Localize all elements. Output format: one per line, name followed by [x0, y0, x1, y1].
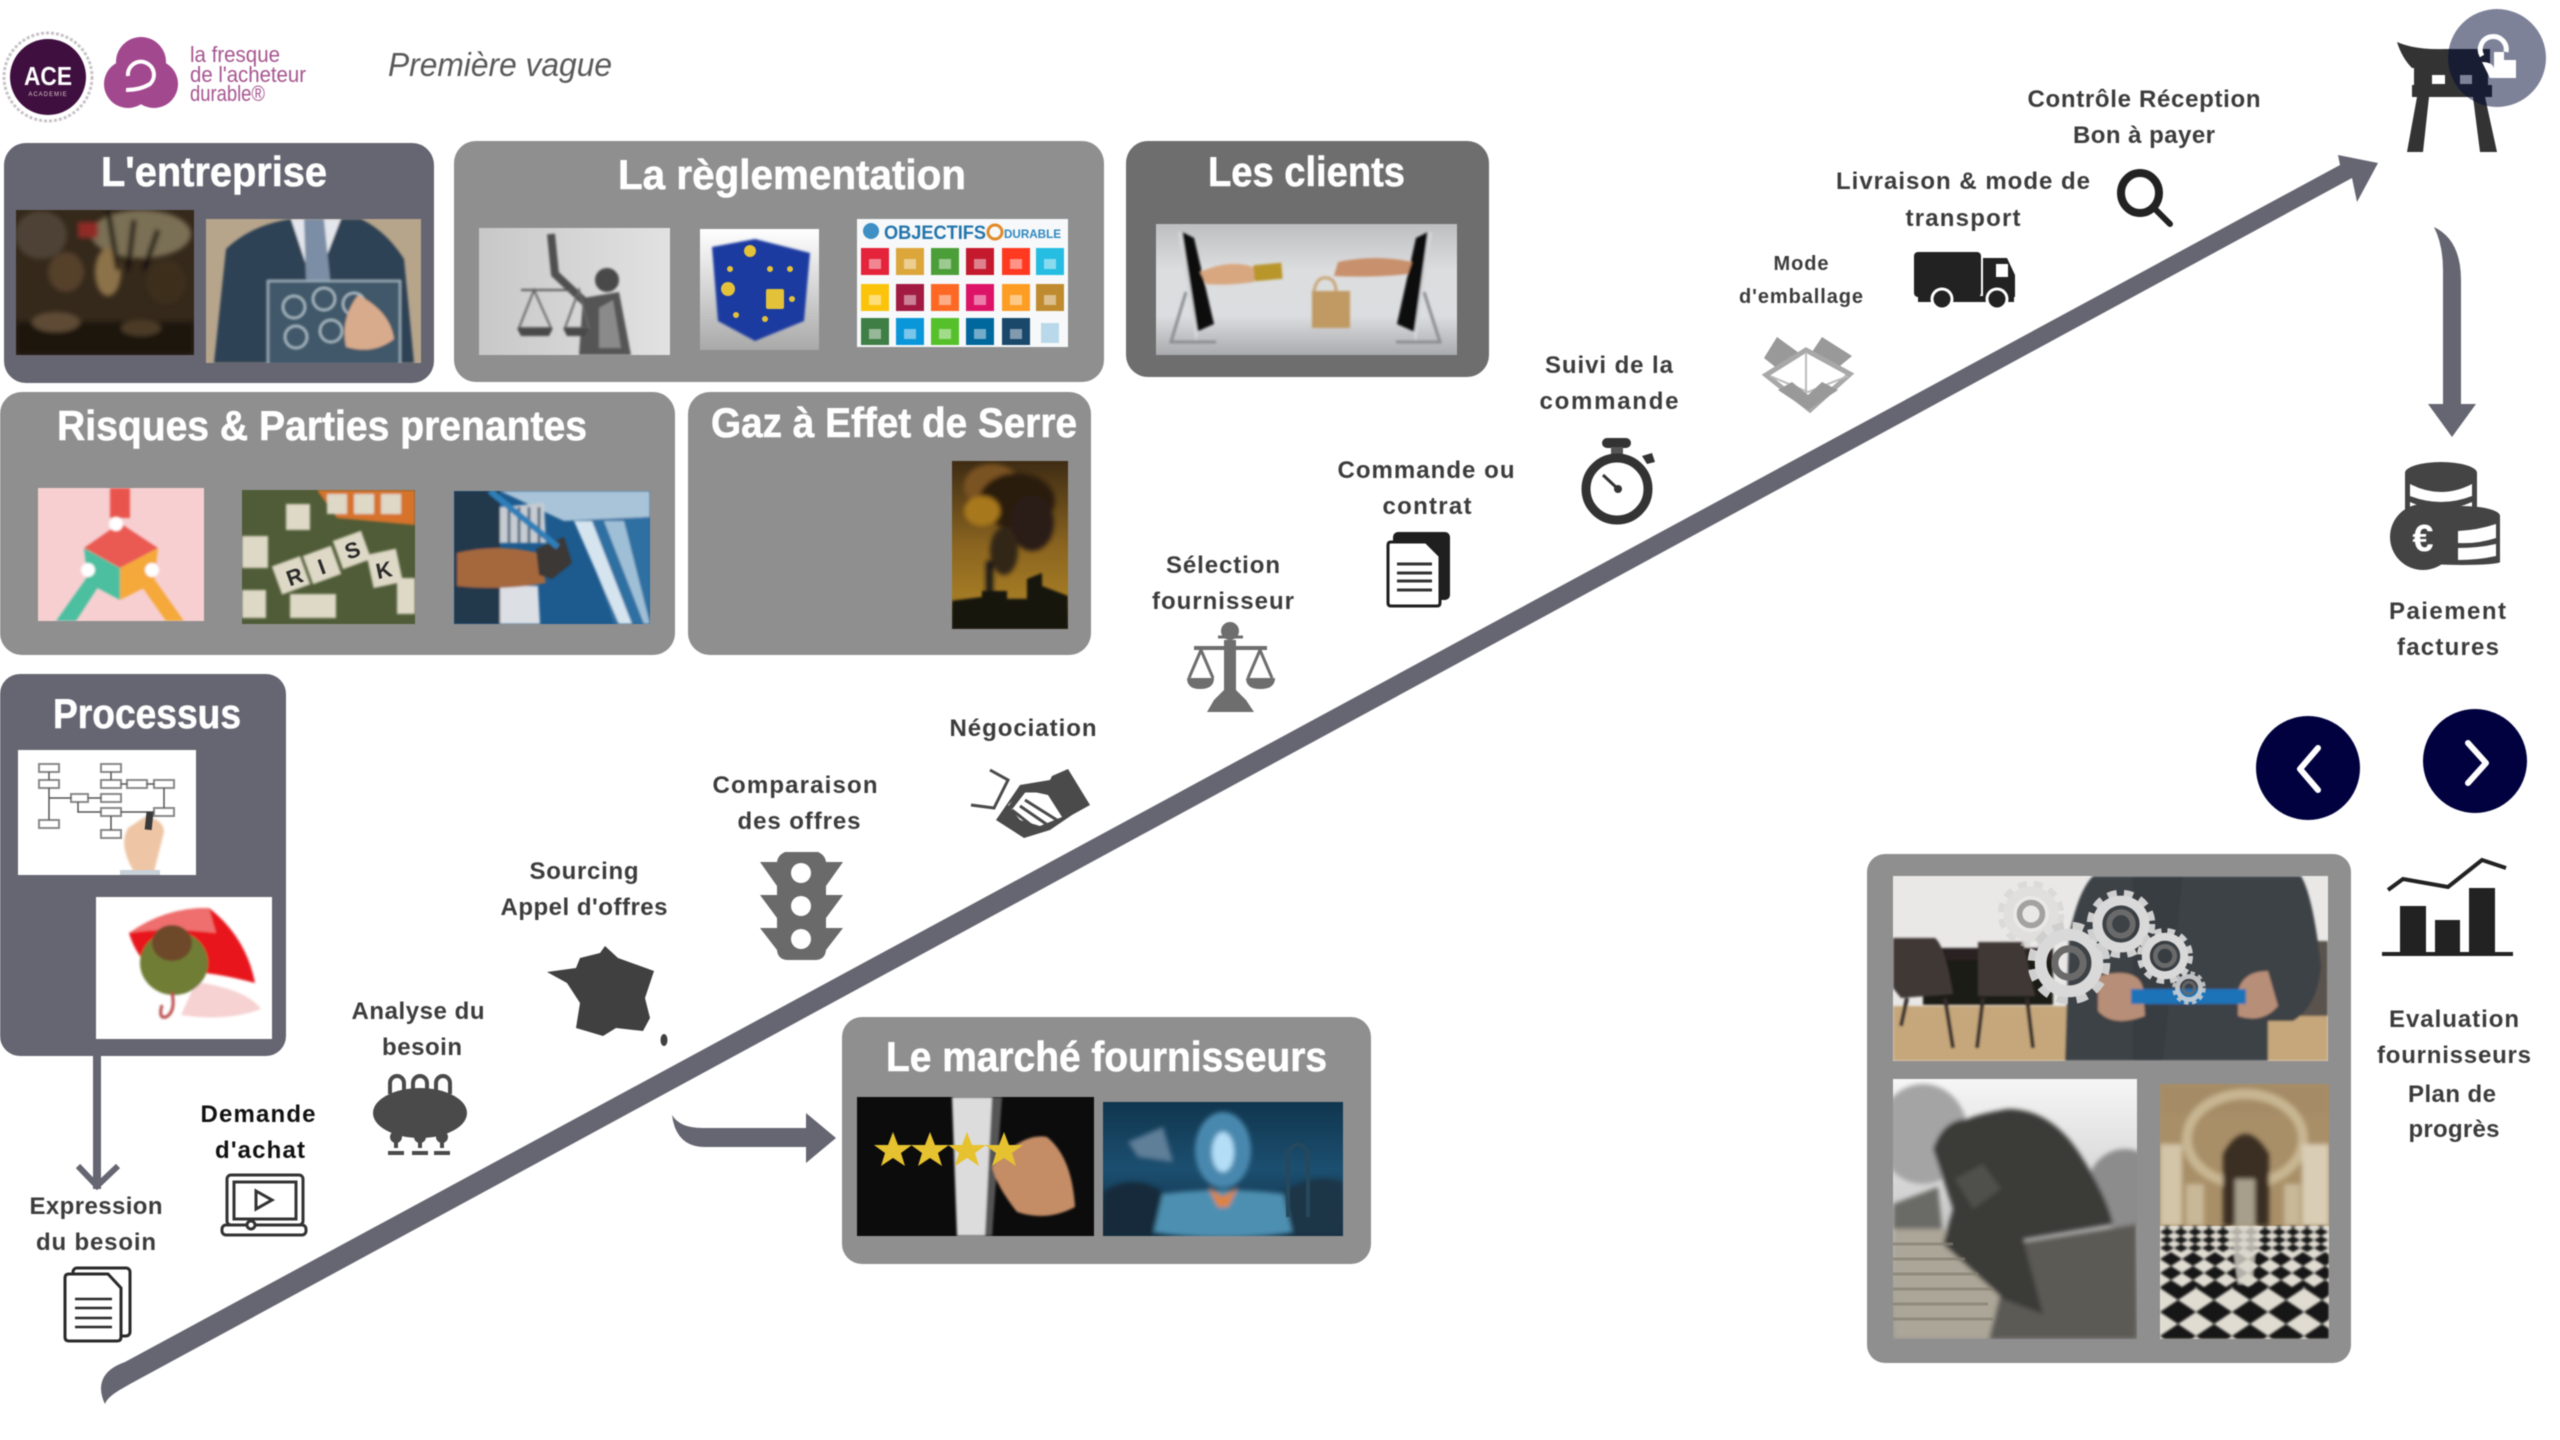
- panel: Processus: [0, 674, 286, 1056]
- step: Suivi de la commande: commande: [1540, 388, 1678, 415]
- logo: la fresque de l'acheteur durable: de l'acheteur: [190, 62, 306, 87]
- icon: traffic light: [760, 852, 843, 960]
- logo: ACE Academie: ACADEMIE: [28, 92, 68, 98]
- step: Evaluation fournisseurs Plan de progrès: Plan de: [2408, 1081, 2496, 1108]
- image: Rodin's Thinker: [1892, 1078, 2138, 1340]
- step: Evaluation fournisseurs Plan de progrès: progrès: [2408, 1116, 2500, 1143]
- button: next: [2423, 709, 2527, 813]
- step: Contrôle Réception Bon à payer: [2028, 86, 2260, 149]
- step: Mode d'emballage: Mode: [1774, 253, 1828, 275]
- step: Commande ou contrat: Commande ou: [1338, 457, 1514, 484]
- image: EU cube with padlock: [699, 228, 820, 350]
- image: palace gallery with checkered floor: [2160, 1084, 2330, 1340]
- step: Analyse du besoin: Analyse du: [352, 998, 484, 1025]
- heading: L'entreprise: L'entreprise: [101, 148, 327, 195]
- panel: photos evaluation: [1867, 854, 2351, 1363]
- step: Paiement factures: [2389, 598, 2506, 661]
- icon: open box: [1764, 337, 1852, 410]
- icon: stopwatch: [1586, 438, 1655, 520]
- step: Négociation: [950, 715, 1096, 838]
- icon: document: [65, 1268, 130, 1341]
- heading: Risques & Parties prenantes: Risques & Parties prenantes: [57, 402, 587, 449]
- step: Analyse du besoin: [352, 998, 484, 1153]
- image: RISK letter dice: [242, 490, 416, 624]
- step: Sélection fournisseur: fournisseur: [1152, 588, 1294, 615]
- image: RISK letter dice: K: [374, 556, 394, 584]
- image: hand drawing flowchart: [17, 749, 197, 876]
- heading: Le marché fournisseurs: Le marché fournisseurs: [886, 1033, 1327, 1080]
- step: Evaluation fournisseurs Plan de progrès: [2377, 1006, 2531, 1143]
- heading: Gaz à Effet de Serre: Gaz à Effet de Serre: [711, 399, 1077, 446]
- button: previous: [2256, 716, 2360, 820]
- heading: Les clients: Les clients: [1208, 148, 1405, 195]
- step: Suivi de la commande: Suivi de la: [1545, 352, 1674, 379]
- logo: la fresque de l'acheteur durable: durable®: [190, 81, 265, 106]
- arrow: reception to payment: [2428, 227, 2476, 437]
- image: rating stars: [856, 1096, 1095, 1237]
- heading: Première vague: Première vague: [388, 46, 612, 83]
- icon: torii gate: [2397, 42, 2497, 152]
- step: Mode d'emballage: d'emballage: [1739, 286, 1863, 308]
- step: Livraison & mode de transport: Livraison & mode de: [1836, 168, 2090, 195]
- step: Sélection fournisseur: [1152, 552, 1294, 712]
- image: Objectifs de développement durable: DURABLE: [1004, 227, 1061, 241]
- icon: handshake: [971, 769, 1090, 838]
- step: Expression du besoin: [30, 1193, 162, 1341]
- image: La Liberté guidant le peuple: [16, 210, 194, 356]
- icon: scales: [1187, 622, 1275, 712]
- step: Livraison & mode de transport: transport: [1906, 205, 2020, 232]
- step: Comparaison des offres: Comparaison: [712, 772, 878, 799]
- logo: ACE Academie: [4, 33, 92, 121]
- icon: truck: [1914, 252, 2015, 309]
- arrow: to Le marché fournisseurs: [672, 1113, 836, 1163]
- icon: contract document: [1388, 532, 1450, 606]
- image: RISK letter dice: I: [314, 554, 329, 580]
- image: blue fantasy landscape: [1102, 1101, 1344, 1237]
- image: red umbrella over tree: [95, 896, 273, 1040]
- image: Objectifs de développement durable: OBJECTIFS: [884, 223, 986, 244]
- image: e-commerce hands and monitors: [1155, 224, 1458, 356]
- panel: La règlementation: [454, 141, 1104, 382]
- step: Contrôle Réception Bon à payer: Bon à payer: [2073, 122, 2215, 149]
- step: Demande d'achat: [200, 1101, 316, 1235]
- image: factory smoke: [951, 460, 1069, 630]
- image: businessman with gears: [1892, 876, 2328, 1062]
- icon: bar and line chart: [2382, 860, 2513, 956]
- step: Livraison & mode de transport: [1836, 168, 2090, 309]
- step: Sélection fournisseur: Sélection: [1166, 552, 1280, 579]
- step: Comparaison des offres: [712, 772, 878, 960]
- step: Sourcing Appel d'offres: [500, 858, 668, 1046]
- step: Paiement factures: factures: [2397, 634, 2499, 661]
- icon: map of France: [547, 946, 668, 1046]
- panel: Le marché fournisseurs: [842, 1017, 1371, 1264]
- step: Négociation: Négociation: [950, 715, 1096, 742]
- step: Evaluation fournisseurs Plan de progrès: fournisseurs: [2377, 1042, 2531, 1069]
- icon: coins with euro: €: [2412, 518, 2434, 560]
- step: Comparaison des offres: des offres: [738, 808, 860, 835]
- step: Mode d'emballage: [1739, 253, 1863, 410]
- icon: magnifying glass: [2121, 173, 2170, 224]
- heading: La règlementation: La règlementation: [618, 151, 966, 198]
- logo: la fresque de l'acheteur durable: la fresque: [190, 42, 280, 67]
- icon: meeting group: [373, 1076, 467, 1153]
- arrow: Processus to Expression du besoin: [78, 1056, 118, 1189]
- step: Sourcing Appel d'offres: Appel d'offres: [500, 894, 668, 921]
- panel: L'entreprise: [4, 143, 434, 383]
- image: Objectifs de développement durable: [856, 218, 1069, 348]
- step: Commande ou contrat: contrat: [1382, 493, 1472, 520]
- step: Paiement factures: Paiement: [2389, 598, 2506, 625]
- step: Sourcing Appel d'offres: Sourcing: [530, 858, 638, 885]
- image: RISK letter dice: S: [341, 536, 364, 565]
- icon: coins with euro: [2390, 462, 2500, 570]
- button: unlock overlay: [2448, 9, 2546, 107]
- step: Expression du besoin: Expression: [30, 1193, 162, 1220]
- panel: Gaz à Effet de Serre: [688, 392, 1091, 655]
- step: Evaluation fournisseurs Plan de progrès: Evaluation: [2389, 1006, 2519, 1033]
- panel: Risques & Parties prenantes: [0, 392, 675, 655]
- step: Suivi de la commande: [1540, 352, 1678, 520]
- step: Demande d'achat: Demande: [200, 1101, 316, 1128]
- heading: Processus: Processus: [53, 690, 241, 737]
- panel: Les clients: [1126, 141, 1489, 377]
- step: Demande d'achat: d'achat: [215, 1137, 305, 1164]
- icon: laptop with play: [222, 1175, 306, 1235]
- image: hands holding puzzle: [37, 487, 205, 622]
- step: Commande ou contrat: [1338, 457, 1514, 606]
- logo: ACE Academie: ACE: [24, 61, 72, 91]
- image: RISK letter dice: R: [283, 562, 307, 591]
- image: statue of justice: [478, 228, 670, 356]
- logo: la fresque de l'acheteur durable: [104, 37, 306, 108]
- main arrow: purchasing process: [101, 155, 2378, 1404]
- step: Expression du besoin: du besoin: [36, 1229, 156, 1256]
- image: worker handling windows: [453, 490, 651, 625]
- step: Analyse du besoin: besoin: [382, 1034, 462, 1061]
- image: businessman touching interface: [206, 218, 422, 364]
- step: Contrôle Réception Bon à payer: Contrôle Réception: [2028, 86, 2260, 113]
